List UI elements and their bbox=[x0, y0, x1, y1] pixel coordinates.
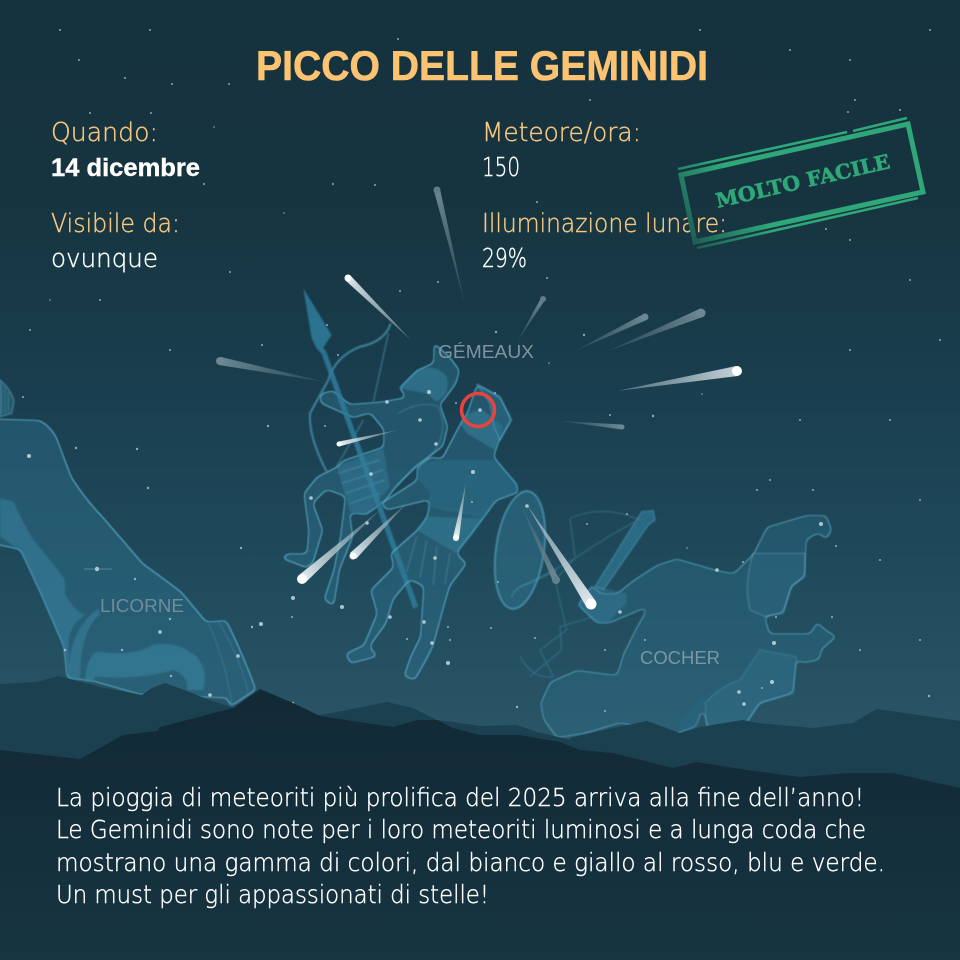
stars bbox=[22, 29, 941, 712]
info: when bbox=[51, 118, 200, 182]
info: visible from: ovunque bbox=[51, 244, 158, 274]
mountains: far range left bbox=[0, 676, 580, 800]
info: moon illumination bbox=[482, 209, 727, 274]
meteor shower bbox=[216, 186, 742, 610]
meteor: upper left bbox=[344, 274, 411, 340]
info: when: 14 dicembre bbox=[51, 154, 200, 182]
info: when: Quando: bbox=[51, 118, 158, 148]
meteor: right 2 bbox=[608, 308, 706, 351]
title: PICCO DELLE GEMINIDI bbox=[256, 42, 708, 89]
label: Gémeaux: GÉMEAUX bbox=[438, 342, 534, 362]
meteor: right 1 bbox=[575, 314, 648, 351]
meteor: top centre bbox=[434, 186, 465, 305]
body bbox=[540, 515, 837, 738]
meteor: grey behind shield bbox=[520, 503, 560, 584]
info: meteors per hour: 150 bbox=[482, 153, 520, 183]
right twin body bbox=[345, 384, 519, 681]
info: meteors per hour bbox=[482, 118, 641, 183]
stamp: difficulty: MOLTO FACILE bbox=[713, 149, 892, 213]
shield bbox=[488, 488, 557, 612]
description text: mostrano una gamma di colori, dal bianco e giallo al rosso, blu e verde. bbox=[56, 848, 885, 877]
info: visible from bbox=[51, 209, 180, 274]
info: moon illumination: Illuminazione lunare: bbox=[482, 209, 727, 239]
spear bbox=[303, 288, 418, 609]
description text bbox=[56, 783, 885, 909]
constellation: Gémeaux twins bbox=[281, 288, 557, 681]
mountains: dark foreground bbox=[0, 689, 960, 960]
left twin body bbox=[281, 342, 460, 607]
label: Licorne: LICORNE bbox=[100, 596, 184, 616]
info: meteors per hour: Meteore/ora: bbox=[482, 118, 641, 148]
radiant marker: red circle bbox=[462, 394, 494, 426]
meteor: bright lower left bbox=[297, 510, 380, 584]
description text: Le Geminidi sono note per i loro meteoriti luminosi e a lunga coda che bbox=[56, 815, 866, 844]
description text: La pioggia di meteoriti più prolifica del 2025 arriva alla fine dell’anno! bbox=[56, 783, 864, 812]
label: Cocher: COCHER bbox=[640, 648, 720, 668]
meteor: lower left 2 bbox=[350, 503, 407, 560]
stamp: difficulty bbox=[678, 118, 923, 248]
bow bbox=[310, 323, 391, 472]
meteor: small right bbox=[560, 421, 624, 430]
info: moon illumination: 29% bbox=[482, 244, 527, 274]
mountains: far range right bbox=[570, 709, 960, 800]
meteor: left grey bbox=[216, 357, 325, 382]
meteor: bright right bbox=[617, 366, 742, 391]
constellation: Cocher bbox=[520, 511, 837, 738]
meteor: bright lower right bbox=[527, 505, 596, 610]
whip and goat bbox=[520, 511, 655, 677]
info: visible from: Visibile da: bbox=[51, 209, 180, 239]
description text: Un must per gli appassionati di stelle! bbox=[56, 880, 489, 909]
meteor: inside right twin bbox=[453, 483, 466, 541]
meteor: inside left twin bbox=[336, 430, 398, 446]
meteor: small upper bbox=[517, 296, 546, 342]
constellation: Licorne bbox=[0, 380, 257, 707]
